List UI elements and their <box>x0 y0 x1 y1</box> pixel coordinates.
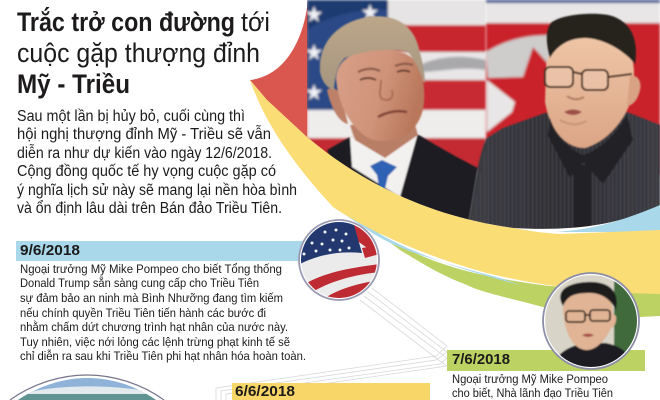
photo subject: Kim <box>465 14 660 232</box>
intro text: và ổn định lâu dài trên Bán đảo Triều Tiên. <box>17 200 282 217</box>
Kim suit <box>465 112 660 232</box>
event text: 9/6/2018: nhằm chấm dứt chương trình hạt nhân của nước này. <box>20 319 288 334</box>
date bar: 9/6/2018 <box>16 241 322 261</box>
Trump suit <box>327 135 478 228</box>
event text: 9/6/2018: chỉ diễn ra sau khi Triều Tiên phi hạt nhân hóa hoàn toàn. <box>20 348 306 363</box>
icon: US flag badge <box>299 218 380 300</box>
icon: Kim portrait badge <box>543 273 640 369</box>
Trump shirt <box>350 133 418 197</box>
event text: 7/6/2018: cho biết, Nhà lãnh đạo Triều Tiên <box>452 386 613 400</box>
decorative curve: blue sliver <box>320 190 520 285</box>
event text: 9/6/2018: Donald Trump sẵn sàng cung cấp cho Triều Tiên <box>20 275 259 290</box>
date bar: 7/6/2018 <box>447 350 645 371</box>
event 7/6/2018 <box>447 350 645 400</box>
title <box>17 6 270 99</box>
icon: city view badge <box>10 375 164 400</box>
photo background: US flag <box>306 0 486 170</box>
event text: 9/6/2018 <box>20 262 306 363</box>
photo background: North Korean flag <box>486 0 660 175</box>
title: tới <box>241 7 270 37</box>
Trump hair <box>320 16 425 90</box>
photo: Trump and Kim in front of national flags <box>306 0 660 232</box>
intro text: hội nghị thượng đỉnh Mỹ - Triều sẽ vẫn <box>17 126 271 143</box>
event text: 9/6/2018: nếu chính quyền Triều Tiên tiến hành các bước đi <box>20 306 266 320</box>
intro text: Cộng đồng quốc tế hy vọng cuộc gặp có <box>17 163 276 180</box>
decorative curve: blue top right <box>555 205 660 232</box>
connector lines between events <box>216 288 447 400</box>
intro text: ý nghĩa lịch sử này sẽ mang lại nền hòa bình <box>17 182 297 199</box>
Kim ear <box>627 76 641 106</box>
Trump ear <box>327 88 348 124</box>
event text: 9/6/2018: Tuy nhiên, việc nới lỏng các lệnh trừng phạt kinh tế sẽ <box>20 335 290 349</box>
intro text: Sau một lần bị hủy bỏ, cuối cùng thì <box>17 108 245 125</box>
date bar: 6/6/2018 <box>232 383 430 400</box>
Kim face <box>545 36 634 148</box>
photo subject: Trump <box>320 16 478 228</box>
date: 9/6/2018: 9/6/2018 <box>20 242 80 259</box>
event 9/6/2018 <box>16 241 322 363</box>
event text: 9/6/2018: sự đảm bảo an ninh mà Bình Nhưỡng đang tìm kiếm <box>20 291 283 305</box>
Trump tie <box>370 160 397 189</box>
event 6/6/2018 <box>232 383 430 400</box>
date: 6/6/2018: 6/6/2018 <box>235 383 295 400</box>
title: Mỹ - Triều <box>17 69 130 99</box>
intro text <box>17 108 297 217</box>
decorative curve: yellow band <box>250 80 660 294</box>
title: cuộc gặp thượng đỉnh <box>17 38 260 68</box>
Trump facial features <box>358 64 413 117</box>
event text: 7/6/2018 <box>452 372 613 400</box>
title: Trắc trở con đường <box>17 6 235 37</box>
event text: 7/6/2018: Ngoại trưởng Mỹ Mike Pompeo <box>452 372 608 386</box>
Kim facial features <box>567 96 584 99</box>
Kim collar <box>548 114 633 184</box>
decorative curve: green band <box>368 226 660 317</box>
event text: 9/6/2018: Ngoại trưởng Mỹ Mike Pompeo cho biết Tổng thống <box>20 262 282 276</box>
Kim hair <box>547 14 636 64</box>
date: 7/6/2018: 7/6/2018 <box>452 351 510 368</box>
decorative curve: red crescent <box>250 0 310 140</box>
Kim glasses <box>545 67 632 90</box>
intro text: diễn ra như dự kiến vào ngày 12/6/2018. <box>17 145 272 162</box>
Trump neck <box>350 125 418 158</box>
Trump face <box>336 50 424 141</box>
